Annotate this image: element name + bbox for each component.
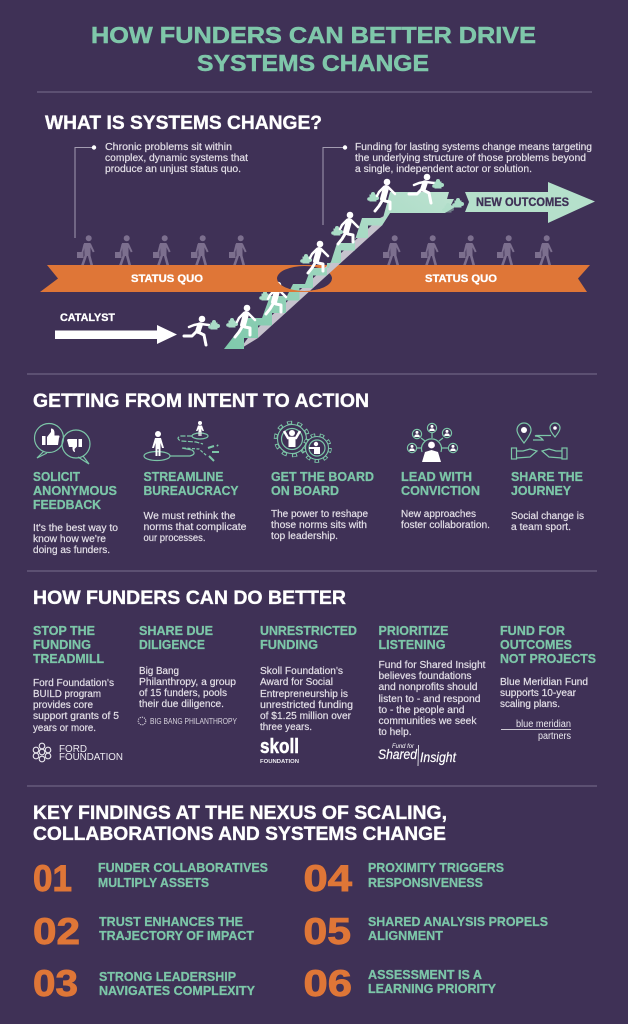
item: lead with conviction — [401, 423, 490, 531]
finding 02: TRAJECTORY OF IMPACT — [99, 929, 254, 943]
logo: ford foundation: FORD — [59, 744, 87, 755]
item: unrestricted funding: FUNDING — [260, 638, 318, 652]
finding 05: SHARED ANALYSIS PROPELS — [368, 915, 548, 929]
item: share due diligence: of 15 funders, pools — [139, 688, 227, 699]
callout: funding for lasting change — [323, 142, 592, 225]
staircase with climbing figures — [224, 179, 464, 349]
item: unrestricted funding: three years. — [260, 722, 312, 733]
item: prioritize listening: listen to - and respond — [378, 694, 480, 705]
item: fund for outcomes not projects: supports 10-year — [500, 688, 577, 699]
finding 06 — [304, 963, 497, 1004]
finding 06: 06 — [304, 963, 352, 1004]
finding 03 — [33, 963, 256, 1004]
finding 04: RESPONSIVENESS — [368, 876, 483, 890]
callout: funding for lasting change: a single, independent actor or solution. — [355, 164, 532, 175]
item: prioritize listening: communities we seek — [378, 716, 478, 727]
panel: how funders can do better — [33, 588, 596, 766]
finding 04: 04 — [304, 858, 352, 899]
title — [91, 22, 536, 76]
title: HOW FUNDERS CAN BETTER DRIVE — [91, 22, 536, 48]
heading: what is systems change: WHAT IS SYSTEMS CHANGE? — [45, 113, 322, 134]
heading: how funders can do better: HOW FUNDERS CAN DO BETTER — [33, 588, 346, 609]
item: stop the funding treadmill: STOP THE — [33, 624, 95, 638]
panel: key findings — [33, 803, 548, 1004]
item: fund for outcomes not projects: OUTCOMES — [500, 638, 572, 652]
item: prioritize listening: to help. — [378, 727, 412, 738]
panel: what is systems change — [40, 113, 595, 349]
finding 05 — [304, 911, 548, 952]
finding 01: FUNDER COLLABORATIVES — [98, 861, 268, 875]
item: stop the funding treadmill: FUNDING — [33, 638, 91, 652]
finding 01: 01 — [33, 858, 72, 899]
item: unrestricted funding: Award for Social — [260, 677, 333, 688]
item: streamline bureaucracy: We must rethink the — [144, 511, 236, 522]
item: unrestricted funding: Entrepreneurship is — [260, 689, 348, 700]
item: fund for outcomes not projects: Blue Meridian Fund — [500, 677, 588, 688]
item: stop the funding treadmill: support grants of 5 — [33, 711, 119, 722]
callout: funding for lasting change: Funding for lasting systems change means targeting — [355, 142, 592, 153]
item: share due diligence: DILIGENCE — [139, 638, 205, 652]
icon: figures on winding path — [144, 421, 219, 461]
logo: blue meridian partners — [501, 719, 571, 742]
figure: catalyst runner — [184, 316, 220, 345]
item: get the board on board: those norms sits with — [271, 520, 367, 531]
figure: runner on platform — [409, 174, 444, 203]
item: get the board on board: top leadership. — [271, 531, 338, 542]
logo: fund for shared insight: Fund for — [392, 743, 415, 750]
panel: getting from intent to action — [33, 391, 584, 556]
item: streamline bureaucracy: norms that complicate — [144, 522, 247, 533]
logo: ford foundation — [33, 743, 123, 763]
finding 02 — [33, 911, 254, 952]
finding 03: NAVIGATES COMPLEXITY — [99, 984, 256, 998]
logo: fund for shared insight: Shared — [378, 747, 417, 762]
heading: key findings: COLLABORATIONS AND SYSTEMS CHANGE — [33, 824, 446, 845]
item: share the journey: JOURNEY — [511, 484, 572, 498]
item: fund for outcomes not projects: NOT PROJECTS — [500, 652, 596, 666]
item: prioritize listening: LISTENING — [378, 638, 446, 652]
logo: big bang philanthropy: BIG BANG PHILANTHROPY — [150, 716, 237, 726]
logo: blue meridian partners: blue meridian — [516, 719, 571, 730]
item: solicit anonymous feedback: doing as funders. — [33, 545, 110, 556]
item: lead with conviction: CONVICTION — [401, 484, 480, 498]
item: get the board on board: The power to reshape — [271, 509, 368, 520]
item: unrestricted funding: Skoll Foundation's — [260, 666, 343, 677]
finding 05: 05 — [304, 911, 351, 952]
item: get the board on board: GET THE BOARD — [271, 470, 374, 484]
title: SYSTEMS CHANGE — [197, 50, 429, 76]
item: streamline bureaucracy: our processes. — [144, 533, 206, 544]
item: prioritize listening: to - the people and — [378, 705, 464, 716]
item: lead with conviction: foster collaboration. — [401, 520, 490, 531]
finding 03: STRONG LEADERSHIP — [99, 970, 236, 984]
item: fund for outcomes not projects: FUND FOR — [500, 624, 565, 638]
finding 05: ALIGNMENT — [368, 929, 443, 943]
item: share due diligence: SHARE DUE — [139, 624, 213, 638]
item: share the journey: Social change is — [511, 511, 584, 522]
heading: key findings: KEY FINDINGS AT THE NEXUS OF SCALING, — [33, 803, 447, 824]
logo: skoll foundation: FOUNDATION — [260, 759, 299, 765]
item: prioritize listening — [378, 624, 486, 766]
item: stop the funding treadmill: Ford Foundation's — [33, 678, 114, 689]
walking figures: status quo — [77, 235, 552, 268]
item: unrestricted funding: UNRESTRICTED — [260, 624, 357, 638]
logo: fund for shared insight — [378, 743, 457, 766]
item: share the journey — [511, 423, 584, 533]
item: streamline bureaucracy: STREAMLINE — [144, 470, 224, 484]
item: stop the funding treadmill: TREADMILL — [33, 652, 104, 666]
logo: skoll foundation — [260, 736, 299, 765]
callout: chronic problems: complex, dynamic systems that — [105, 153, 248, 164]
item: prioritize listening: Fund for Shared Insight — [378, 660, 486, 671]
callout: chronic problems: produce an unjust status quo. — [105, 164, 241, 175]
logo: skoll foundation: skoll — [260, 736, 299, 758]
finding 01: MULTIPLY ASSETS — [98, 876, 209, 890]
item: get the board on board — [271, 422, 374, 542]
item: unrestricted funding — [260, 624, 357, 765]
item: streamline bureaucracy — [144, 421, 247, 544]
finding 06: ASSESSMENT IS A — [368, 968, 482, 982]
item: solicit anonymous feedback: SOLICIT — [33, 470, 80, 484]
ribbon: status quo — [40, 265, 590, 292]
item: share the journey: SHARE THE — [511, 470, 583, 484]
ribbon overlap in front of lower stairs — [262, 278, 338, 292]
item: solicit anonymous feedback — [33, 424, 118, 556]
item: prioritize listening: believes foundations — [378, 671, 472, 682]
finding 04 — [304, 858, 504, 899]
ribbon: status quo: STATUS QUO — [425, 273, 497, 285]
finding 04: PROXIMITY TRIGGERS — [368, 861, 504, 875]
item: stop the funding treadmill: provides core — [33, 700, 93, 711]
arrow: catalyst: CATALYST — [60, 312, 115, 324]
finding 02: 02 — [33, 911, 80, 952]
icon: gears with people — [276, 422, 330, 461]
item: unrestricted funding: unrestricted funding — [260, 700, 353, 711]
logo: blue meridian partners: partners — [538, 731, 571, 742]
icon: thumbs up and down — [34, 424, 90, 464]
arrow: catalyst — [55, 312, 177, 344]
icon: hands and map pins — [512, 423, 567, 459]
item: get the board on board: ON BOARD — [271, 484, 339, 498]
item: prioritize listening: PRIORITIZE — [378, 624, 448, 638]
callout: funding for lasting change: the underlying structure of those problems beyond — [355, 153, 586, 164]
finding 03: 03 — [33, 963, 78, 1004]
item: share due diligence: Big Bang — [139, 666, 179, 677]
item: share due diligence: Philanthropy, a group — [139, 677, 236, 688]
item: solicit anonymous feedback: ANONYMOUS — [33, 484, 117, 498]
item: fund for outcomes not projects: scaling plans. — [500, 699, 560, 710]
finding 06: LEARNING PRIORITY — [368, 982, 497, 996]
item: streamline bureaucracy: BUREAUCRACY — [144, 484, 239, 498]
item: solicit anonymous feedback: It's the best way to — [33, 523, 118, 534]
item: stop the funding treadmill: years or more. — [33, 723, 96, 734]
item: solicit anonymous feedback: know how we're — [33, 534, 106, 545]
heading: getting from intent to action: GETTING FROM INTENT TO ACTION — [33, 391, 369, 412]
item: stop the funding treadmill: BUILD program — [33, 689, 101, 700]
icon: leader with network — [407, 423, 458, 462]
item: share the journey: a team sport. — [511, 522, 571, 533]
finding 01 — [33, 858, 268, 899]
item: prioritize listening: and nonprofits should — [378, 682, 478, 693]
item: unrestricted funding: of $1.25 million over — [260, 711, 352, 722]
item: solicit anonymous feedback: FEEDBACK — [33, 498, 101, 512]
logo: ford foundation: FOUNDATION — [59, 752, 123, 763]
item: share due diligence: their due diligence. — [139, 699, 224, 710]
item: lead with conviction: New approaches — [401, 509, 476, 520]
arrow: new outcomes — [465, 182, 595, 223]
item: fund for outcomes not projects — [500, 624, 596, 742]
ribbon: status quo: STATUS QUO — [131, 273, 203, 285]
item: stop the funding treadmill — [33, 624, 123, 763]
logo: fund for shared insight: Insight — [420, 750, 457, 765]
heading: key findings — [33, 803, 447, 845]
item: share due diligence — [138, 624, 237, 726]
callout: chronic problems: Chronic problems sit within — [105, 142, 232, 153]
item: lead with conviction: LEAD WITH — [401, 470, 472, 484]
arrow: new outcomes: NEW OUTCOMES — [476, 197, 569, 209]
callout: chronic problems — [75, 142, 248, 238]
finding 02: TRUST ENHANCES THE — [99, 915, 243, 929]
